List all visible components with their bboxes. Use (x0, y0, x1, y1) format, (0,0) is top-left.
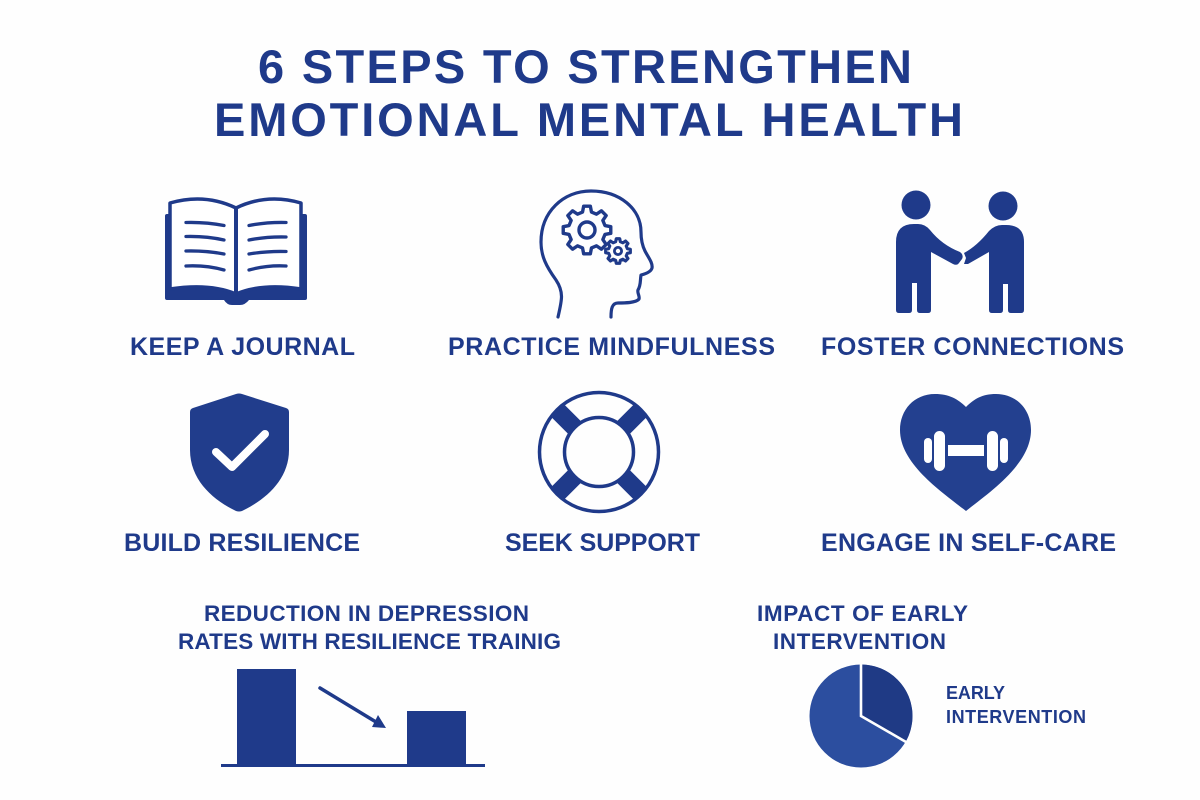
step: practice mindfulness (448, 191, 775, 361)
legend label: INTERVENTION (946, 707, 1086, 727)
chart heading: INTERVENTION (773, 629, 946, 654)
label: build resilience: BUILD RESILIENCE (124, 529, 360, 557)
step: foster connections (821, 190, 1124, 361)
chart heading: REDUCTION IN DEPRESSION (204, 601, 529, 626)
step: build resilience (124, 394, 360, 557)
icon: head with gears (541, 191, 652, 317)
label: seek support: SEEK SUPPORT (505, 529, 700, 557)
step: engage in self-care (821, 394, 1116, 557)
chart heading (178, 601, 561, 654)
legend label: EARLY (946, 683, 1005, 703)
step: keep a journal (130, 199, 355, 361)
step: seek support (505, 392, 700, 557)
bar chart (221, 669, 485, 767)
label: keep a journal: KEEP A JOURNAL (130, 333, 355, 361)
icon: two people shaking hands (896, 190, 1024, 313)
icon: life ring (540, 392, 658, 512)
panel: pie chart section (757, 601, 1086, 768)
icon: heart with dumbbell (900, 394, 1031, 511)
label: engage in self-care: ENGAGE IN SELF-CARE (821, 529, 1116, 557)
label: practice mindfulness: PRACTICE MINDFULNESS (448, 333, 775, 361)
chart heading: RATES WITH RESILIENCE TRAINIG (178, 629, 561, 654)
label: foster connections: FOSTER CONNECTIONS (821, 333, 1124, 361)
pie chart (810, 664, 913, 768)
arrow: downward trend (320, 688, 386, 728)
icon: shield with check mark (190, 394, 289, 512)
title: 6 STEPS TO STRENGTHEN (258, 40, 912, 93)
panel: bar chart section (178, 601, 561, 767)
title (214, 40, 963, 146)
legend label (946, 683, 1086, 727)
icon: open book (165, 199, 307, 305)
title: EMOTIONAL MENTAL HEALTH (214, 93, 963, 146)
chart heading (757, 601, 968, 654)
chart heading: IMPACT OF EARLY (757, 601, 968, 626)
